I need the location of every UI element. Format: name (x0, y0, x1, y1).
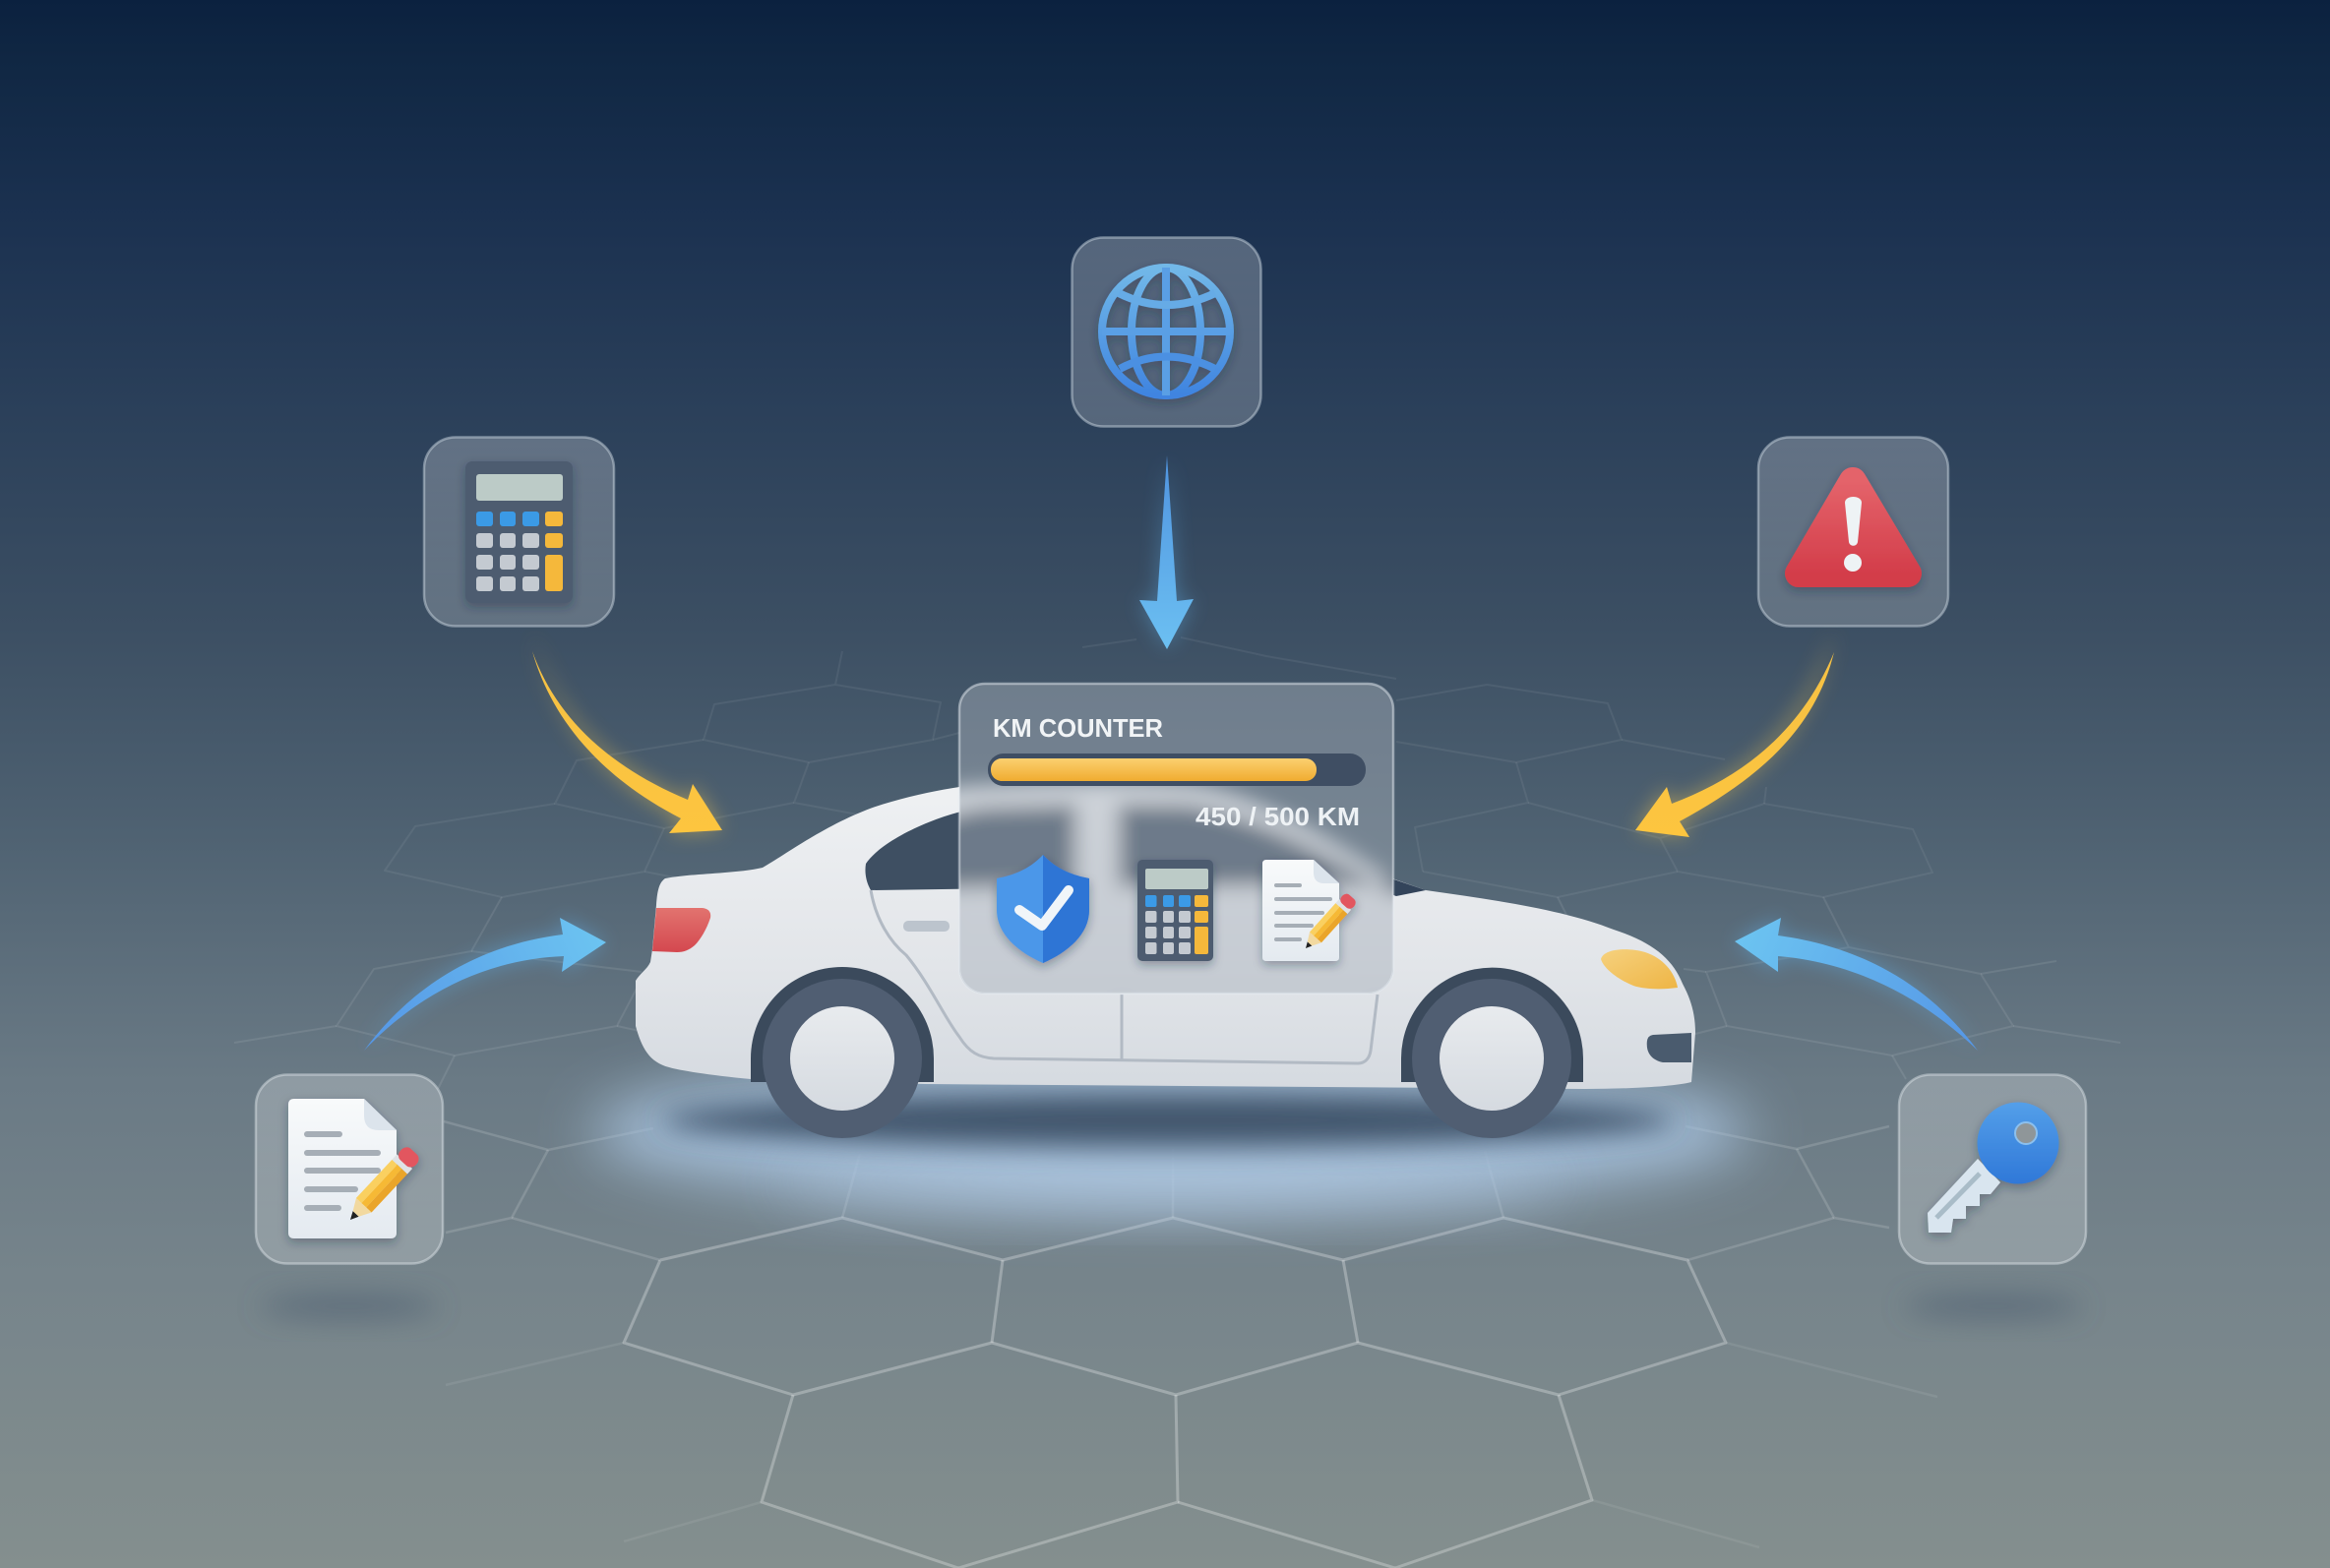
car (636, 782, 1695, 1138)
door seams (871, 890, 1378, 1063)
front grille (1647, 1033, 1691, 1062)
tail light (652, 908, 710, 952)
door handle (903, 921, 950, 932)
card: calculator (424, 437, 614, 626)
card: document (256, 1074, 443, 1263)
icon: shield (997, 855, 1089, 963)
card: globe (1073, 238, 1261, 427)
icon: calculator (465, 461, 573, 603)
icon: document with pencil (288, 1099, 421, 1238)
arrow: key to car (1735, 918, 1978, 1051)
rear side window (865, 804, 1076, 890)
car shadow (661, 1093, 1675, 1148)
rear wheel (751, 967, 934, 1138)
arrow: document to car (364, 918, 606, 1051)
arrow: warning to car (1635, 630, 1834, 837)
km value: 450 / 500 KM (1196, 802, 1360, 831)
windshield tip (1382, 875, 1426, 896)
car body (636, 782, 1695, 1089)
arrow: calculator to car (532, 630, 722, 833)
icon: small document with pencil (1262, 860, 1358, 961)
card: warning (1758, 437, 1948, 626)
card shadow: key (1905, 1295, 2082, 1318)
icon: warning triangle (1799, 481, 1908, 573)
card: key (1899, 1074, 2086, 1263)
panel title: KM COUNTER (993, 713, 1163, 743)
icon: globe (1102, 268, 1230, 395)
panel: km counter (958, 683, 1395, 995)
front side window (1118, 804, 1382, 887)
headlight (1601, 949, 1678, 989)
icon: small calculator (1137, 860, 1213, 961)
card shadow: document (261, 1295, 438, 1318)
icon: key (1928, 1102, 2058, 1233)
arrow: globe to panel (1139, 455, 1194, 649)
progress bar (988, 754, 1366, 786)
glow under car (590, 1057, 1751, 1205)
hexagon floor grid (234, 637, 2120, 1568)
front wheel (1401, 968, 1583, 1138)
